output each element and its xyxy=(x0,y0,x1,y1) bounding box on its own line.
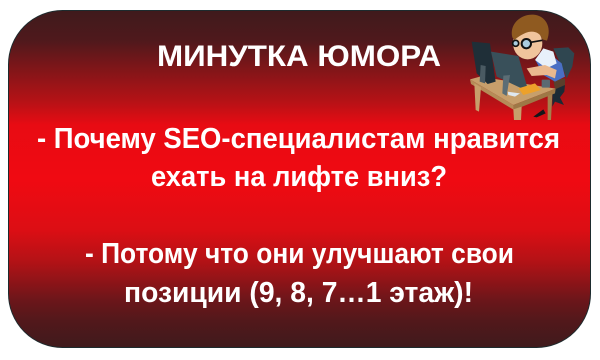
foot xyxy=(533,109,546,117)
chair xyxy=(553,47,574,78)
glasses xyxy=(522,39,531,48)
back monitor xyxy=(472,42,496,84)
text block: question: - Почему SEO-специалистам нравится xyxy=(37,123,560,155)
text block: answer xyxy=(85,238,514,309)
desk legs xyxy=(474,83,481,112)
head xyxy=(513,27,542,59)
desk top xyxy=(470,77,556,105)
text block: answer: - Потому что они улучшают свои xyxy=(85,238,514,270)
front monitor xyxy=(491,52,527,88)
torso xyxy=(536,50,565,82)
text block: question xyxy=(37,123,560,193)
text block: answer: позиции (9, 8, 7…1 этаж)! xyxy=(124,277,473,309)
mug xyxy=(542,80,550,88)
icon: SEO specialist at a desk xyxy=(470,15,574,120)
books xyxy=(518,83,541,95)
mouse pad xyxy=(508,92,520,97)
shorts xyxy=(553,78,565,89)
title: МИНУТКА ЮМОРА xyxy=(157,40,441,73)
text block: question: ехать на лифте вниз? xyxy=(151,161,447,193)
